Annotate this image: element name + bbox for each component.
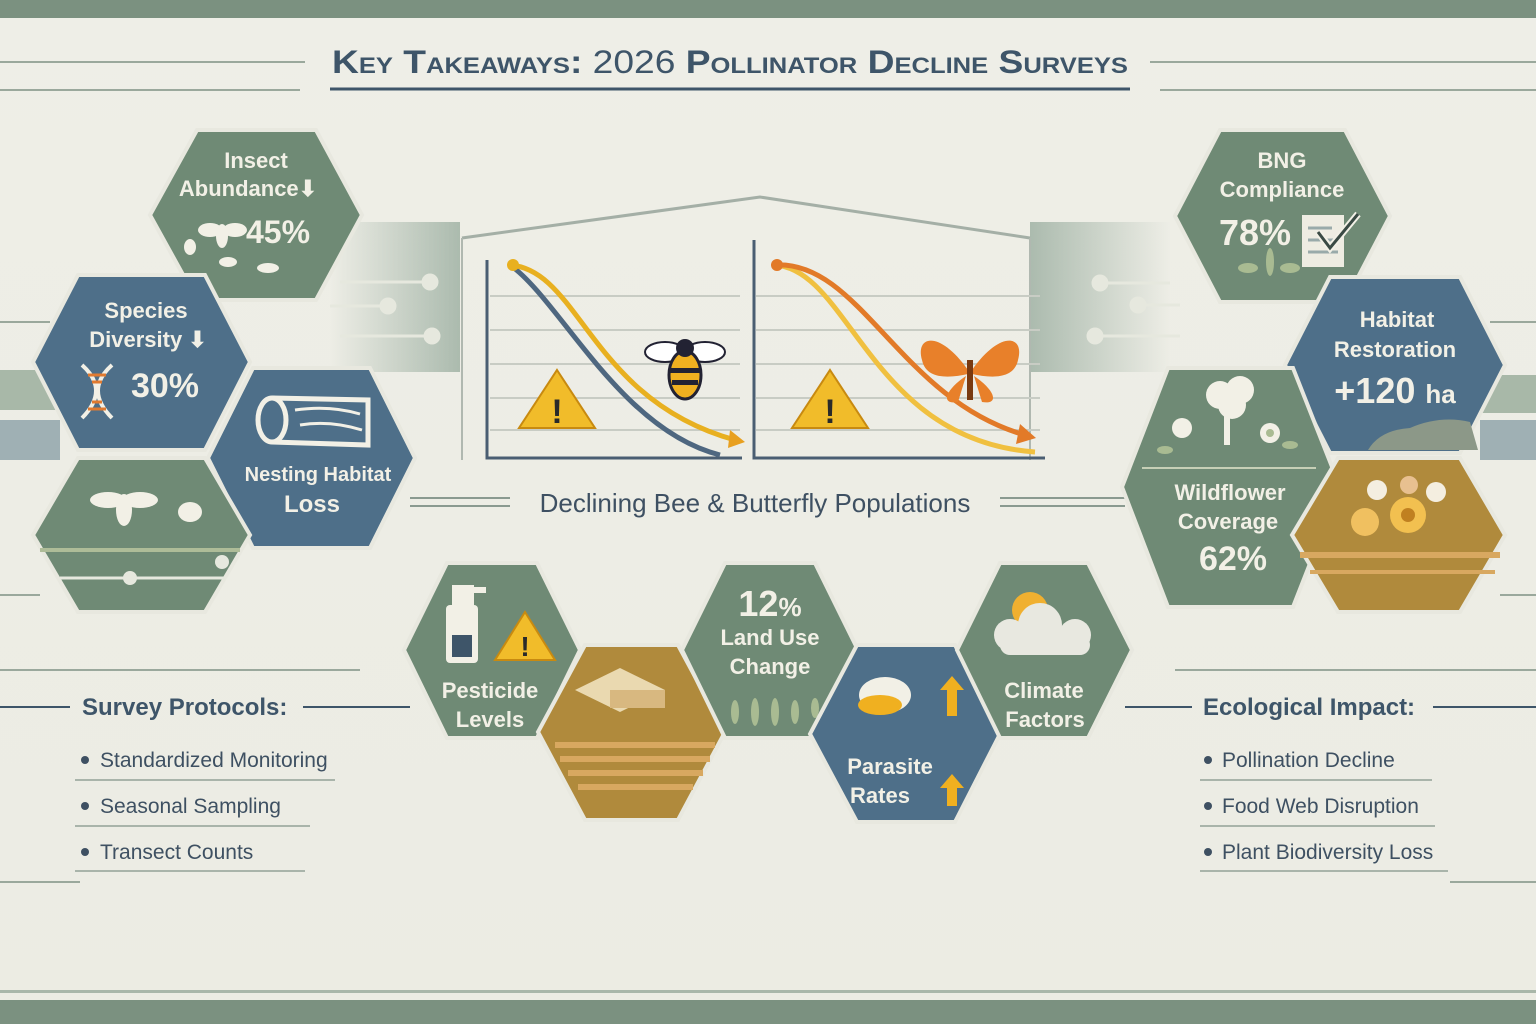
hex: habitat restoration: Restoration [1334, 337, 1456, 362]
hex: land use change: 12% [738, 583, 802, 624]
hex: habitat restoration [1285, 277, 1505, 453]
bottom band [0, 1000, 1536, 1024]
hex: insects bottom-left [33, 458, 250, 612]
hex: parasite rates: Rates [850, 783, 910, 808]
hex: insect abundance: Insect [224, 148, 288, 173]
ecological impact list: Plant Biodiversity Loss [1222, 841, 1433, 864]
chart: bees [487, 259, 745, 458]
icon: butterfly [921, 341, 1019, 402]
hex: nesting habitat loss: Loss [284, 491, 340, 518]
icon: spray bottle [446, 585, 486, 663]
chart: butterflies [754, 240, 1045, 458]
hex: land use change [682, 563, 858, 738]
top band [0, 0, 1536, 18]
survey protocols list: Survey Protocols: [82, 694, 287, 721]
icon: warning [792, 370, 868, 431]
survey protocols list: Transect Counts [100, 841, 253, 864]
hex: parasite rates: Parasite [847, 754, 933, 779]
ecological impact list: Pollination Decline [1222, 749, 1395, 772]
hex: wildflower coverage: Wildflower [1174, 480, 1286, 505]
hex: climate factors: Factors [1005, 707, 1085, 732]
hex: wildflower coverage: Coverage [1178, 509, 1278, 534]
icon: bee [645, 339, 725, 399]
chart caption: Declining Bee & Butterfly Populations [540, 488, 970, 518]
ecological impact list: Food Web Disruption [1222, 795, 1419, 818]
ecological impact list: Ecological Impact: [1203, 694, 1415, 721]
icon: checklist [1302, 214, 1358, 267]
title: Key Takeaways: 2026 Pollinator Decline Surveys [332, 44, 1128, 80]
icon: dna [82, 365, 112, 418]
icon: log [258, 398, 368, 445]
hex: BNG compliance: 78% [1219, 212, 1291, 253]
hex: species diversity: Species [104, 298, 188, 323]
hex: BNG compliance: Compliance [1220, 177, 1344, 202]
icon: sun and cloud [994, 592, 1091, 655]
icon: warning: ! [824, 393, 836, 431]
ecological impact list [1125, 694, 1536, 871]
icon: parasite [858, 676, 964, 716]
chart panel [462, 197, 1045, 460]
survey protocols list: Standardized Monitoring [100, 749, 328, 772]
survey protocols list [0, 694, 410, 871]
hex: land/building gold [538, 645, 725, 820]
survey protocols list: Seasonal Sampling [100, 795, 281, 818]
hex: wildflower coverage [1122, 368, 1340, 607]
hex: insect abundance [150, 130, 362, 300]
icon: tree and flowers [1157, 376, 1298, 454]
hex: BNG compliance: BNG [1258, 148, 1306, 173]
hex: species diversity: 30% [131, 367, 199, 405]
hex: nesting habitat loss [208, 368, 415, 548]
icon: warning: ! [520, 631, 530, 662]
hex: parasite rates [810, 645, 1000, 822]
hex: pesticide levels: Pesticide [442, 678, 538, 703]
hex: insect abundance: Abundance⬇ [179, 176, 317, 201]
hex: gold flowers [1292, 458, 1505, 612]
hex: habitat restoration: +120 ha [1334, 370, 1456, 411]
hex: species diversity [33, 275, 250, 450]
hex: land use change: Land Use [720, 625, 820, 650]
hex: pesticide levels: Levels [456, 707, 524, 732]
hex: wildflower coverage: 62% [1199, 540, 1267, 578]
hex: pesticide levels [404, 563, 580, 738]
hex: climate factors: Climate [1004, 678, 1084, 703]
hex: species diversity: Diversity ⬇ [89, 327, 207, 352]
hex: land use change: Change [730, 654, 810, 679]
icon: warning [495, 612, 555, 662]
hex: nesting habitat loss: Nesting Habitat [245, 464, 392, 486]
icon: warning [519, 370, 595, 431]
icon: bees [184, 223, 279, 273]
hex: BNG compliance [1175, 130, 1390, 302]
hex: insect abundance: 45% [246, 214, 310, 250]
hex: climate factors [957, 563, 1132, 738]
icon: warning: ! [551, 393, 563, 431]
hex: habitat restoration: Habitat [1360, 307, 1435, 332]
